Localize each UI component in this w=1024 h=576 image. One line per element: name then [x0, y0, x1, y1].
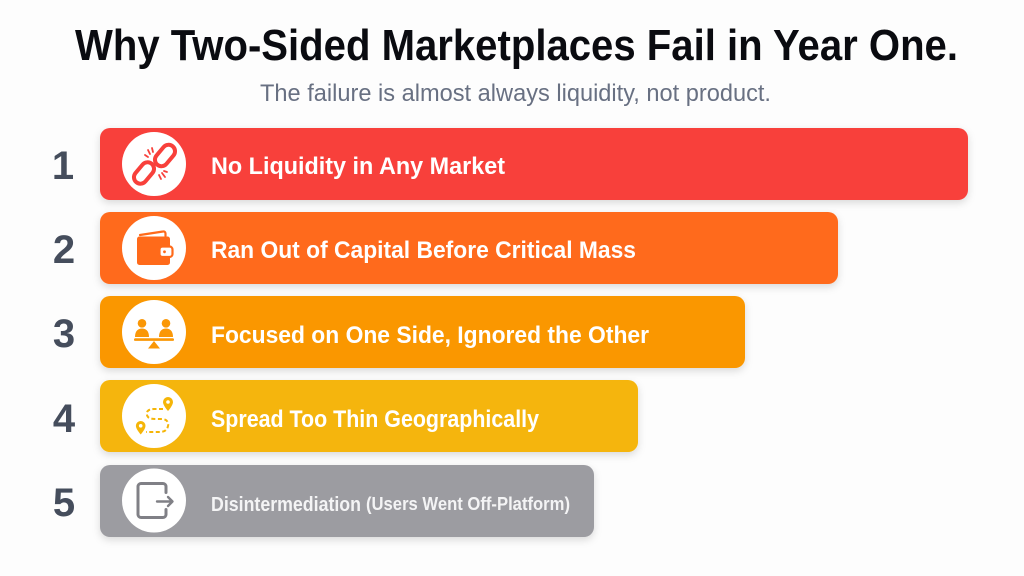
icon: balance with two people: [122, 300, 186, 364]
label 5: (Users Went Off-Platform): [366, 494, 570, 514]
bar 3: [100, 296, 745, 368]
label 1: No Liquidity in Any Market: [211, 153, 505, 180]
rank number 2: 2: [53, 228, 75, 272]
icon: wallet: [122, 216, 186, 280]
label 3: Focused on One Side, Ignored the Other: [211, 322, 649, 349]
icon: broken chain link: [122, 132, 186, 196]
rank number 1: 1: [52, 144, 74, 188]
title: Why Two-Sided Marketplaces Fail in Year One.: [75, 21, 958, 70]
rank number 4: 4: [53, 397, 76, 441]
rank number 3: 3: [53, 312, 75, 356]
label 4: Spread Too Thin Geographically: [211, 406, 540, 433]
label 2: Ran Out of Capital Before Critical Mass: [211, 237, 636, 264]
bar 5: [100, 465, 594, 537]
icon: dashed route with two pins: [122, 384, 186, 448]
row 2: Ran Out of Capital Before Critical Mass: [53, 212, 838, 284]
icon: exit door with arrow: [122, 468, 186, 532]
row 4: Spread Too Thin Geographically: [53, 380, 638, 452]
row 1: No Liquidity in Any Market: [52, 128, 968, 200]
row 5: Disintermediation (Users Went Off-Platform): [53, 465, 594, 537]
rank number 5: 5: [53, 481, 75, 525]
label 5: [211, 494, 570, 516]
subtitle: The failure is almost always liquidity, not product.: [260, 80, 771, 107]
bar 2: [100, 212, 838, 284]
label 5: Disintermediation: [211, 494, 361, 516]
bar 1: [100, 128, 968, 200]
row 3: Focused on One Side, Ignored the Other: [53, 296, 745, 368]
bar 4: [100, 380, 638, 452]
